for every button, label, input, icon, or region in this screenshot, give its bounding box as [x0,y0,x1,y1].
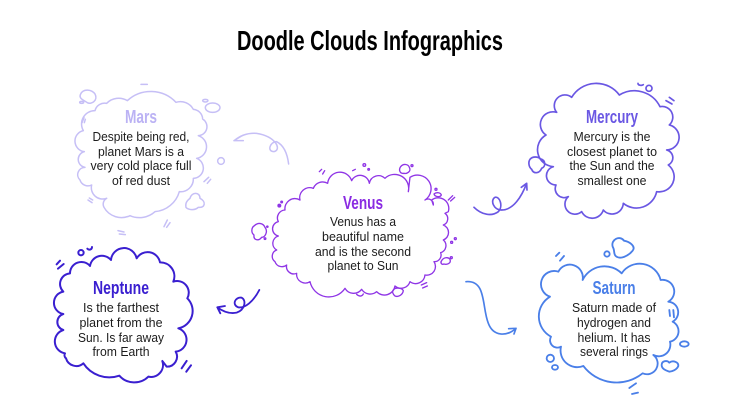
panel: Mars [75,84,224,235]
text: Venus: and is the second [315,244,411,259]
panel: Saturn [539,238,689,394]
heading: Mars: Mars [125,107,157,127]
heading: Saturn: Saturn [592,278,636,298]
text: Neptune: Sun. Is far away [78,330,164,345]
text: Saturn: helium. It has [578,330,651,345]
text: Saturn [572,300,656,359]
cloud: Venus [252,164,456,297]
text: Saturn: Saturn made of [572,300,656,315]
cloud: Mercury [529,83,679,218]
text: Neptune: planet from the [80,315,162,330]
text: Mars [90,129,192,188]
text: Mercury: closest planet to [567,144,657,159]
text: Mars: of red dust [112,173,170,188]
panel: Mercury [529,83,679,218]
panel: Venus [252,164,456,297]
text: Venus: planet to Sun [328,258,398,273]
cloud: Neptune [54,247,193,382]
text: Neptune: Is the farthest [83,300,159,315]
arrow: Venus to Neptune [217,290,259,313]
text: Mars: very cold place full [90,158,192,173]
text: Venus: beautiful name [322,229,404,244]
text: Mars: planet Mars is a [98,144,185,159]
panel: Neptune [54,247,193,382]
text: Saturn: several rings [580,344,648,359]
text: Mercury: Mercury is the [574,129,650,144]
arrow: Venus to Mercury [474,183,527,215]
text: Mercury [567,129,657,188]
text: Saturn: hydrogen and [577,315,651,330]
cloud: Saturn [539,238,689,394]
text: Mercury: smallest one [578,173,646,188]
text: Neptune [78,300,164,359]
text: Neptune: from Earth [92,344,150,359]
arrow: Venus to Mars [234,133,289,164]
text: Venus: Venus has a [330,214,397,229]
arrow: Venus to Saturn [466,282,516,334]
text: Venus [315,214,411,273]
heading: Mercury: Mercury [586,107,638,127]
text: Mercury: the Sun and the [570,158,654,173]
cloud: Mars [75,84,224,235]
heading: Neptune: Neptune [93,278,149,298]
heading: Venus: Venus [343,193,383,213]
text: Mars: Despite being red, [92,129,190,144]
title: Doodle Clouds Infographics [237,25,503,56]
